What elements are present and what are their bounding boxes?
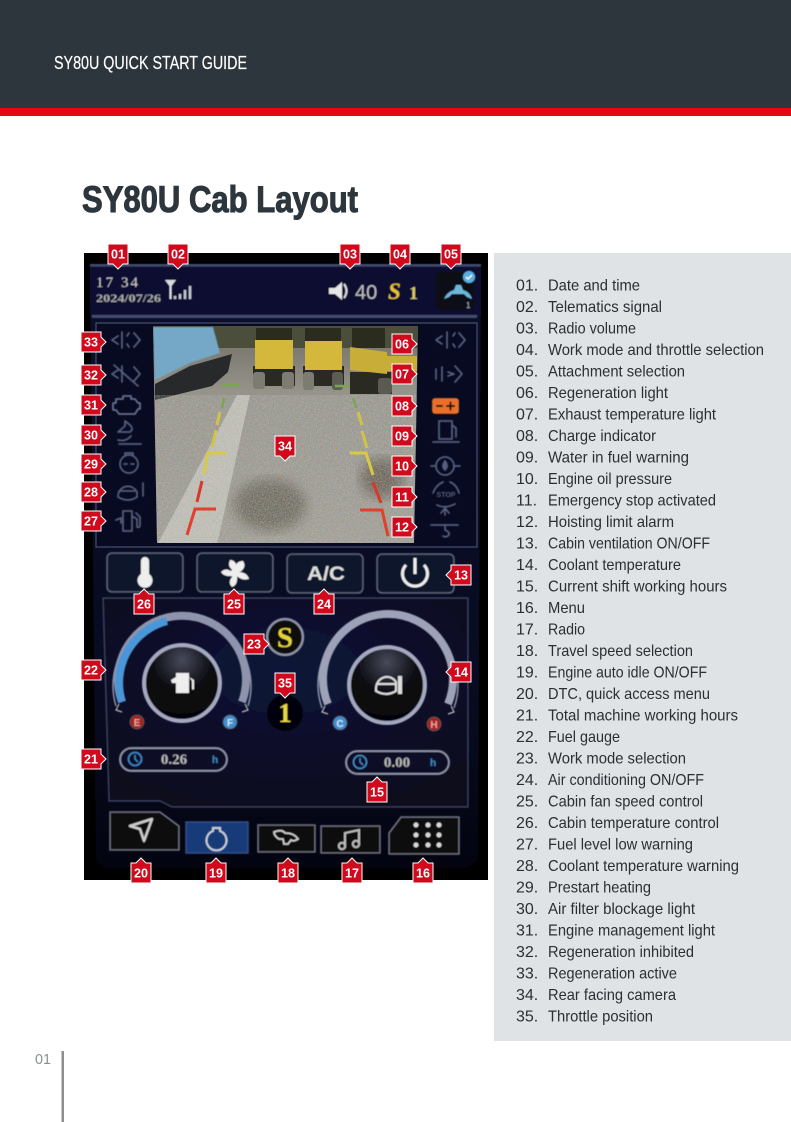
tag 26 [134, 589, 154, 614]
tag 29 [81, 454, 106, 474]
fuel gauge: E [134, 718, 141, 729]
tag 26: 26 [137, 596, 151, 612]
tag 18: 18 [281, 866, 295, 880]
tag 09 [392, 426, 417, 446]
tag 31: 31 [84, 398, 98, 412]
tag 02 [168, 244, 188, 269]
callout tags [81, 244, 471, 883]
panel: legend list: 34. [516, 987, 538, 1004]
panel: legend list: Work mode and throttle selection [548, 342, 764, 359]
panel: legend list: 05. [516, 364, 538, 380]
tag 34: 34 [278, 438, 293, 454]
panel: legend list: Emergency stop activated [548, 492, 716, 510]
panel: legend list: Travel speed selection [548, 643, 693, 660]
coolant gauge: H [430, 720, 438, 731]
panel: legend list: 30. [516, 901, 538, 918]
tag 28: 28 [84, 484, 98, 500]
panel: legend list: Fuel level low warning [548, 836, 693, 854]
tag 10: 10 [395, 458, 409, 474]
machine hours readouts: 0.00 [384, 755, 410, 771]
status bar: 17 34 [96, 275, 138, 291]
tag 27 [81, 511, 106, 531]
machine hours readouts [120, 748, 449, 774]
right warning icons: STOP [437, 492, 456, 499]
tag 14 [446, 662, 471, 682]
panel: legend list: 06. [516, 385, 538, 402]
control buttons row [107, 553, 454, 593]
rear camera view [150, 326, 420, 546]
right warning icons [431, 332, 465, 537]
tag 32: 32 [84, 368, 98, 382]
panel: legend list: Charge indicator [548, 428, 657, 445]
panel: legend list: Menu [548, 600, 585, 617]
tag 25: 25 [227, 596, 241, 612]
left warning icons [112, 332, 143, 531]
panel: legend list: 03. [516, 320, 538, 338]
panel: legend list: 23. [516, 750, 538, 768]
gauge panel [103, 598, 468, 807]
panel: legend list: 15. [516, 578, 538, 596]
panel: legend list: Engine oil pressure [548, 471, 672, 488]
tag 27: 27 [84, 514, 98, 528]
panel: legend list: 33. [516, 966, 538, 982]
tag 16: 16 [416, 866, 430, 880]
tag 05 [441, 244, 461, 269]
icon column frame [96, 323, 477, 547]
panel: legend list: Air filter blockage light [548, 901, 696, 918]
panel: legend list: Regeneration inhibited [548, 944, 694, 961]
tag 19: 19 [209, 866, 223, 880]
panel: legend list: 21. [516, 708, 538, 724]
panel: legend list: Radio [548, 622, 585, 638]
panel: legend list: 13. [516, 536, 538, 552]
panel: legend list: Engine auto idle ON/OFF [548, 664, 707, 682]
panel: legend list: 14. [516, 557, 538, 574]
panel: legend list: 04. [516, 342, 538, 359]
tag 34 [275, 436, 295, 461]
panel: legend list: Regeneration active [548, 966, 677, 982]
tag 22 [81, 660, 106, 680]
tag 04 [390, 244, 410, 269]
bottom navigation [110, 812, 459, 854]
tag 04: 04 [393, 246, 408, 262]
tag 21 [81, 749, 106, 769]
tag 23: 23 [247, 636, 261, 652]
panel: legend list: 16. [516, 600, 538, 617]
tag 13: 13 [454, 568, 468, 582]
tag 33 [81, 332, 106, 352]
panel: legend list: Attachment selection [548, 364, 685, 380]
tag 13 [446, 565, 471, 585]
header bar: SY80U QUICK START GUIDE [54, 53, 247, 73]
tag 24 [314, 589, 334, 614]
tag 19 [206, 858, 226, 883]
panel: legend list: Cabin fan speed control [548, 794, 703, 810]
work mode indicator: 1 [278, 698, 292, 728]
panel: legend list: Coolant temperature [548, 557, 681, 574]
tag 25 [224, 589, 244, 614]
tag 12 [392, 517, 417, 537]
panel: legend list: Radio volume [548, 320, 636, 338]
tag 18 [278, 858, 298, 883]
fuel gauge: F [227, 718, 233, 729]
header bar [0, 0, 791, 116]
tag 31 [81, 395, 106, 415]
status bar: 2024/07/26 [96, 291, 161, 305]
status bar [90, 264, 481, 318]
panel: legend list: Fuel gauge [548, 729, 620, 746]
panel: legend list: 02. [516, 299, 538, 316]
panel: legend list: Telematics signal [548, 299, 662, 316]
panel: legend list: 27. [516, 836, 538, 854]
tag 16 [413, 858, 433, 883]
panel: legend list: Throttle position [548, 1008, 653, 1026]
panel: legend list: DTC, quick access menu [548, 686, 710, 703]
panel: legend list: Rear facing camera [548, 987, 676, 1004]
tag 10 [392, 456, 417, 476]
tag 01: 01 [111, 246, 125, 262]
panel: legend list: Work mode selection [548, 750, 686, 768]
panel: legend list: Prestart heating [548, 880, 651, 896]
tag 09: 09 [395, 428, 409, 444]
panel: legend list: 35. [516, 1008, 538, 1026]
tag 14: 14 [454, 664, 469, 680]
panel: legend list: Coolant temperature warning [548, 858, 739, 875]
panel: legend list: Engine management light [548, 922, 716, 940]
tag 20 [131, 858, 151, 883]
tag 03: 03 [343, 246, 357, 262]
tag 03 [340, 244, 360, 269]
tag 08: 08 [395, 398, 409, 414]
tag 22: 22 [84, 662, 98, 678]
tag 33: 33 [84, 334, 98, 350]
panel: legend list [494, 253, 791, 1041]
panel: legend list: 25. [516, 794, 538, 810]
tag 24: 24 [317, 596, 332, 612]
panel: legend list: 22. [516, 729, 538, 746]
panel: legend list: Current shift working hours [548, 578, 727, 596]
tag 23 [244, 634, 269, 654]
tag 06 [392, 334, 417, 354]
panel: legend list: 29. [516, 880, 538, 896]
tag 29: 29 [84, 456, 98, 472]
panel: legend list: Date and time [548, 278, 640, 294]
machine hours readouts: 0.26 [161, 752, 188, 768]
tag 35 [275, 673, 295, 698]
panel: legend list: 19. [516, 664, 538, 682]
tag 20: 20 [134, 866, 148, 880]
tag 06: 06 [395, 336, 409, 352]
tag 08 [392, 396, 417, 416]
panel: legend list: 31. [516, 922, 538, 940]
tag 05: 05 [444, 246, 458, 262]
page number [35, 1051, 64, 1122]
panel: legend list: Total machine working hours [548, 708, 738, 724]
tag 30 [81, 425, 106, 445]
tag 07: 07 [395, 366, 409, 382]
panel: legend list: Regeneration light [548, 385, 669, 402]
machine hours readouts: h [430, 758, 436, 769]
control buttons row: A/C [307, 564, 345, 585]
tag 28 [81, 482, 106, 502]
panel: legend list: 32. [516, 944, 538, 961]
tag 32 [81, 365, 106, 385]
panel: legend list: 20. [516, 686, 538, 703]
tag 12: 12 [395, 520, 409, 534]
tag 15 [367, 777, 387, 802]
coolant gauge [318, 614, 458, 731]
panel: legend list: Air conditioning ON/OFF [548, 772, 704, 789]
panel: legend list: Exhaust temperature light [548, 406, 717, 424]
status bar: 1 [466, 301, 471, 310]
tag 21: 21 [84, 752, 98, 766]
title: SY80U Cab Layout [82, 179, 358, 220]
panel: legend list: 28. [516, 858, 538, 875]
work mode indicator [267, 619, 303, 731]
fuel gauge [113, 616, 251, 729]
panel: legend list: 07. [516, 406, 538, 424]
tag 17 [342, 858, 362, 883]
tag 35: 35 [278, 676, 292, 690]
panel: legend list: 01. [516, 278, 538, 294]
status bar: 1 [409, 283, 418, 303]
panel: legend list: 08. [516, 428, 538, 445]
work mode indicator: S [277, 622, 293, 654]
panel: legend list: 11. [516, 492, 537, 510]
page number: 01 [35, 1051, 51, 1068]
panel: legend list: Water in fuel warning [548, 450, 689, 466]
panel: cab display photo [84, 253, 488, 880]
tag 07 [392, 364, 417, 384]
tag 11 [392, 487, 417, 507]
tag 11: 11 [395, 490, 409, 504]
status bar: 40 [355, 282, 377, 304]
panel: legend list: 17. [516, 622, 538, 638]
panel: legend list: 12. [516, 514, 538, 531]
tag 01 [108, 244, 128, 269]
panel: legend list: 18. [516, 643, 538, 660]
tag 17: 17 [345, 866, 359, 880]
panel: legend list: Cabin ventilation ON/OFF [548, 536, 710, 552]
panel: legend list: 26. [516, 815, 538, 832]
panel: legend list: 09. [516, 450, 538, 466]
machine hours readouts: h [212, 755, 218, 766]
status bar: S [388, 279, 401, 304]
panel: legend list: Hoisting limit alarm [548, 514, 674, 531]
panel: legend list: Cabin temperature control [548, 815, 719, 832]
coolant gauge: C [336, 719, 344, 730]
panel: legend list: 24. [516, 772, 538, 789]
panel: legend list: 10. [516, 471, 538, 488]
tag 30: 30 [84, 428, 98, 442]
tag 15: 15 [370, 784, 384, 800]
tag 02: 02 [171, 246, 185, 262]
